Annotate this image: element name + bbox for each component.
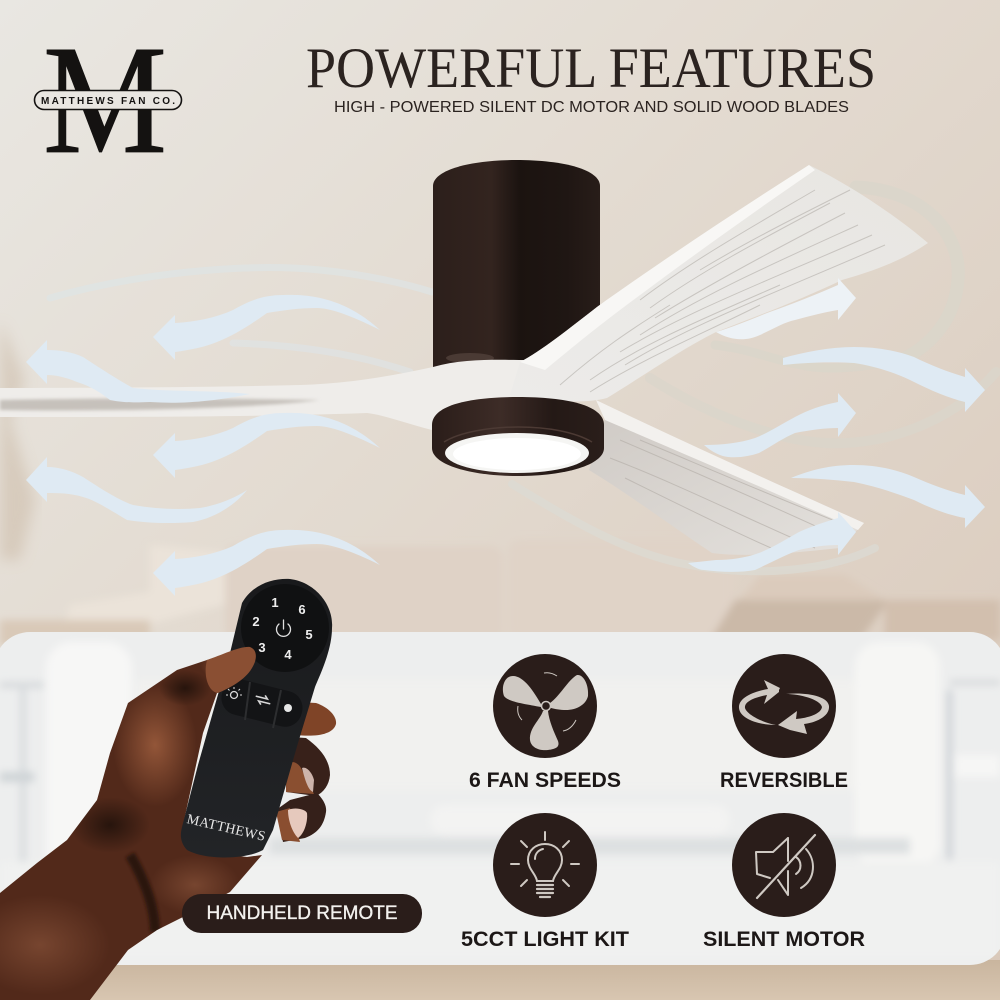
remote body: 2 — [252, 614, 260, 629]
fan blade upper right — [510, 165, 928, 401]
remote body: 4 — [284, 647, 292, 662]
remote body: 6 — [298, 602, 306, 617]
remote label pill: HANDHELD REMOTE — [206, 903, 398, 924]
logo banner: MATTHEWS FAN CO. — [41, 96, 175, 107]
remote body: 5 — [305, 627, 313, 642]
bottom floor strip — [0, 960, 1000, 1000]
blurred plant at left edge — [0, 320, 35, 560]
fan motor housing — [433, 160, 600, 385]
label: 6 FAN SPEEDS — [469, 769, 621, 792]
fan blade lower right — [589, 400, 864, 555]
remote dial — [241, 584, 329, 672]
fan blade left — [0, 360, 560, 432]
remote buttons — [218, 676, 306, 730]
light kit ring — [432, 397, 604, 476]
ceiling fan — [0, 160, 928, 555]
feature: reversible — [720, 654, 848, 792]
icon: rotate arrows — [732, 654, 836, 758]
icon: fan — [493, 654, 597, 758]
remote label pill — [182, 894, 422, 933]
feature: 6 fan speeds — [469, 654, 621, 792]
title: POWERFUL FEATURES — [306, 37, 876, 100]
frosted panel — [0, 632, 1000, 965]
hand holding remote — [0, 579, 336, 1000]
lower fingers — [276, 702, 336, 842]
label: REVERSIBLE — [720, 769, 848, 792]
remote body: 1 — [271, 595, 279, 610]
icon: muted speaker — [732, 813, 836, 917]
remote body — [181, 579, 332, 858]
air swirl lines — [50, 187, 996, 571]
label: 5CCT LIGHT KIT — [461, 928, 629, 951]
feature: light kit — [461, 813, 629, 951]
air flow arrows — [26, 278, 985, 596]
left arrows — [26, 295, 380, 596]
hand back and arm — [0, 640, 270, 1000]
subtitle: HIGH - POWERED SILENT DC MOTOR AND SOLID WOOD BLADES — [334, 99, 849, 116]
remote brand: MATTHEWS — [185, 812, 267, 845]
feature: silent motor — [703, 813, 865, 951]
label: SILENT MOTOR — [703, 928, 865, 951]
logo: M — [43, 13, 167, 186]
blurred sofa behind panel — [0, 540, 1000, 645]
right arrows — [688, 278, 985, 572]
thumb — [206, 647, 256, 693]
icon: light bulb — [493, 813, 597, 917]
remote body: 3 — [258, 640, 266, 655]
logo banner — [34, 90, 182, 110]
power icon — [276, 620, 290, 636]
